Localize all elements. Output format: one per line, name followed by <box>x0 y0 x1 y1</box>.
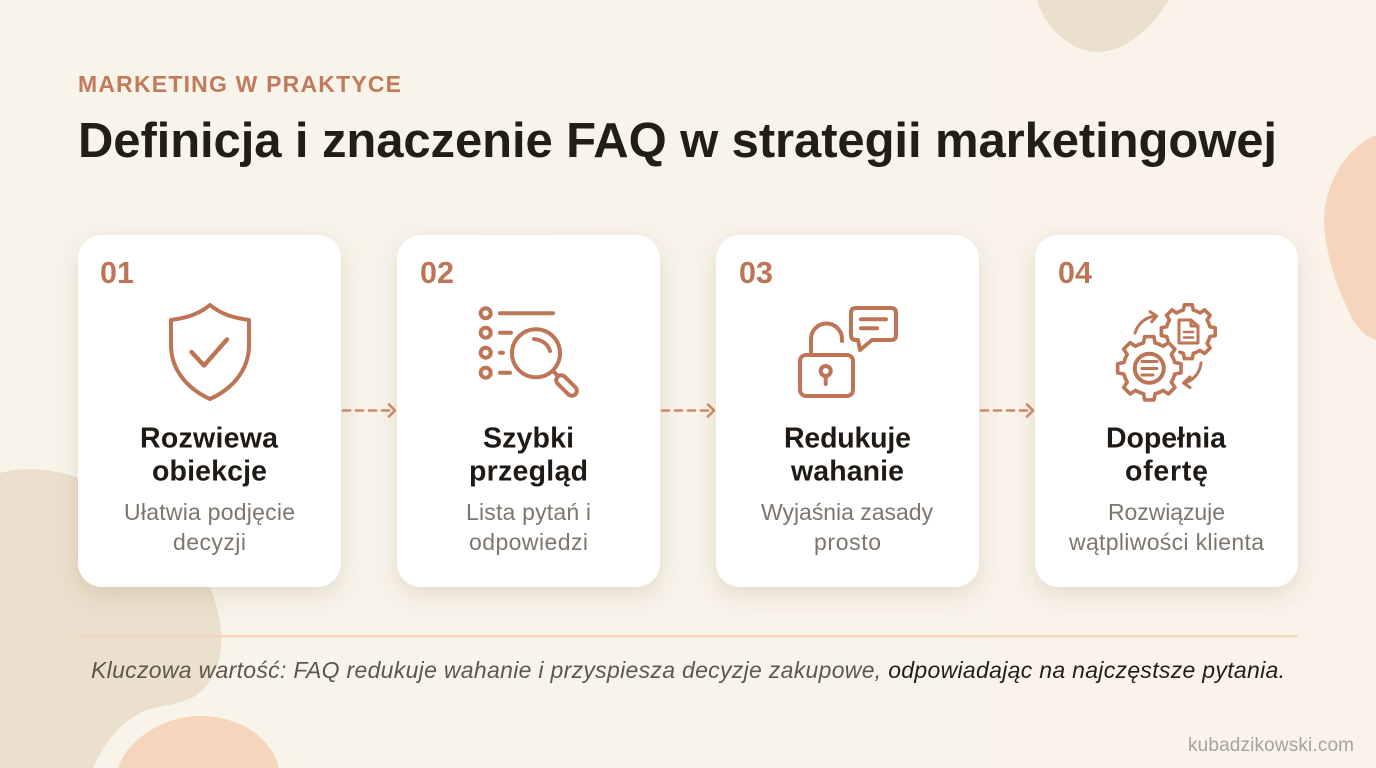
eyebrow: MARKETING W PRAKTYCE <box>78 71 401 97</box>
panel: card 04 <box>1035 235 1298 587</box>
arrow 1 <box>343 404 395 416</box>
title: Definicja i znaczenie FAQ w strategii marketingowej <box>78 114 1277 168</box>
site credit: kubadzikowski.com <box>1188 735 1354 756</box>
heading: Rozwiewa <box>140 422 279 454</box>
description: Rozwiązuje <box>1108 499 1225 525</box>
number 03: 03 <box>739 256 773 290</box>
panel: card 02 <box>397 235 660 587</box>
heading line 2: przegląd <box>469 456 588 488</box>
arrow 3 <box>981 404 1033 416</box>
background blob: bottom <box>118 716 279 768</box>
number 04: 04 <box>1058 256 1092 290</box>
heading: Szybki <box>483 422 574 454</box>
description line 2: odpowiedzi <box>469 529 588 555</box>
description line 2: wątpliwości klienta <box>1068 529 1264 555</box>
heading line 2: wahanie <box>790 456 904 488</box>
background blob: right <box>1324 135 1376 340</box>
key value statement: Kluczowa wartość: FAQ redukuje wahanie i przyspiesza decyzje zakupowe, odpowiadając na najczęstsze pytania. <box>91 657 1285 683</box>
description: Ułatwia podjęcie <box>124 499 295 525</box>
background blob: top <box>1037 0 1169 52</box>
description line 2: decyzji <box>173 529 246 555</box>
description: Wyjaśnia zasady <box>761 499 934 525</box>
description line 2: prosto <box>814 529 881 555</box>
description: Lista pytań i <box>466 499 591 525</box>
panel: card 03 <box>716 235 979 587</box>
arrow 2 <box>662 404 714 416</box>
number 01: 01 <box>100 256 134 290</box>
heading line 2: obiekcje <box>152 456 267 488</box>
icon: open lock with speech bubble <box>800 308 896 396</box>
panel: card 01 <box>78 235 341 587</box>
heading: Redukuje <box>784 422 911 454</box>
icon: gears with document <box>1118 305 1215 400</box>
icon: list with magnifier <box>481 308 579 398</box>
background blob: left <box>0 469 221 768</box>
heading: Dopełnia <box>1106 422 1227 454</box>
heading line 2: ofertę <box>1125 456 1208 488</box>
number 02: 02 <box>420 256 454 290</box>
icon: shield with check <box>171 305 249 399</box>
